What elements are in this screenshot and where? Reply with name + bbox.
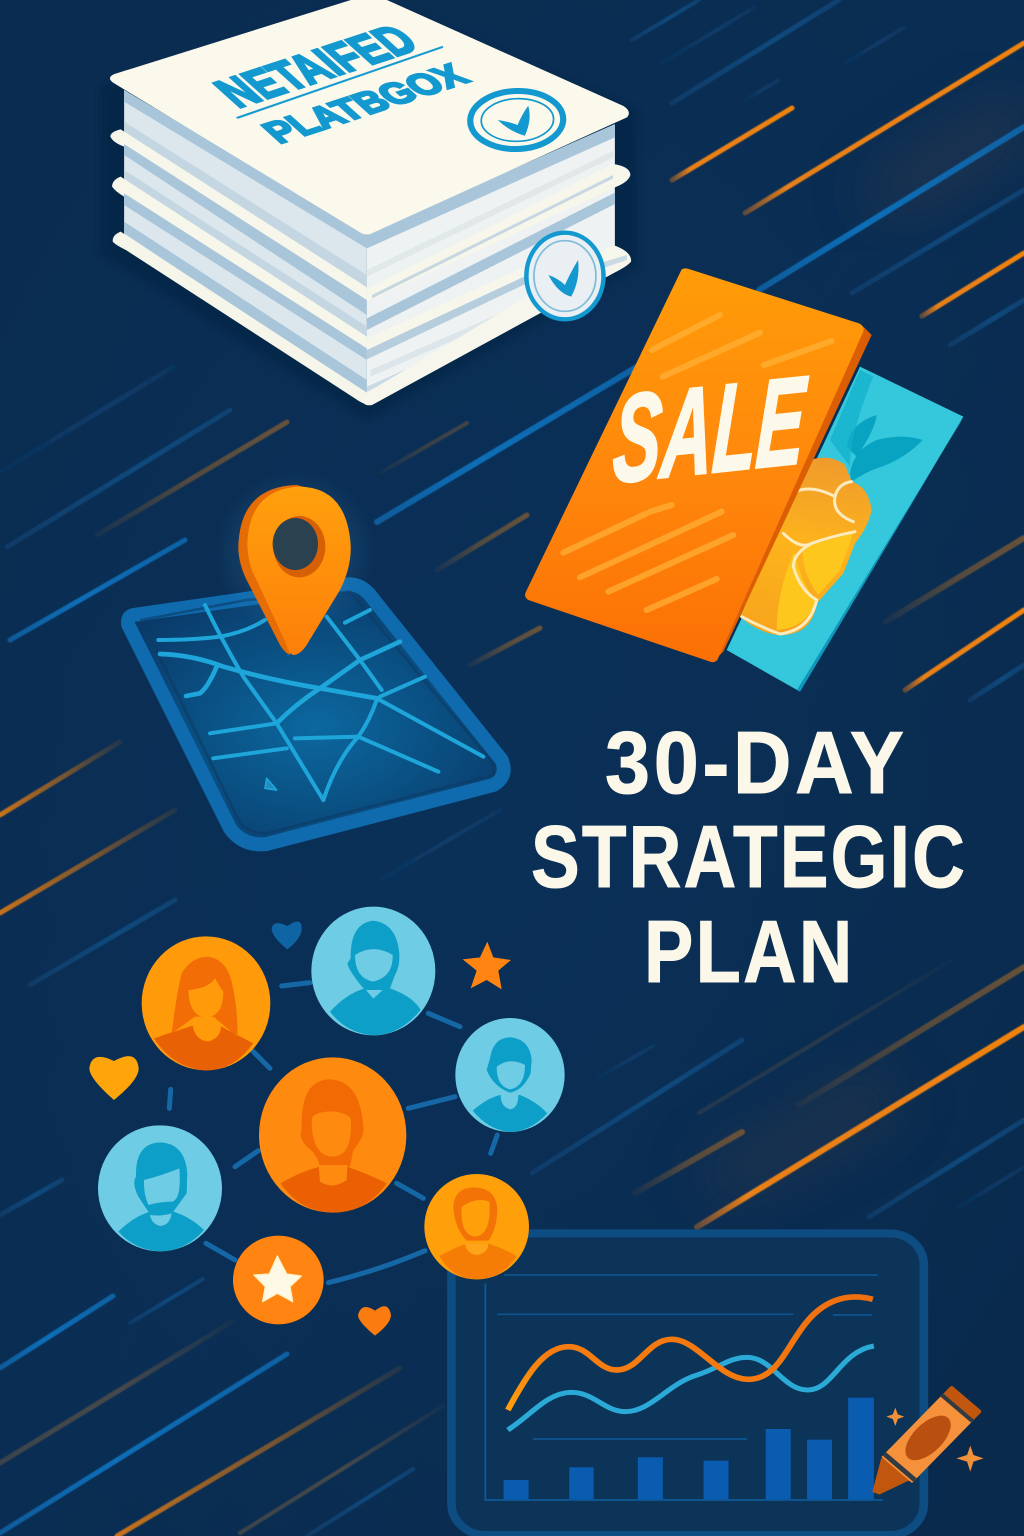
person: bearded man, teal left <box>98 1125 222 1251</box>
map with location pin <box>128 470 504 844</box>
book right side <box>363 124 631 405</box>
crayon <box>859 1385 982 1506</box>
map tablet <box>128 584 504 844</box>
pin glow <box>215 470 375 637</box>
chart frame <box>451 1233 924 1535</box>
honey jar <box>740 458 872 635</box>
flyers: sale card and product card <box>525 268 963 692</box>
orange sale card <box>525 268 872 662</box>
dashboard chart <box>451 1233 984 1535</box>
sparkles <box>886 1408 984 1472</box>
cover seal <box>469 89 564 151</box>
bars <box>504 1398 874 1499</box>
title: STRATEGIC <box>531 809 967 907</box>
cover title lines <box>203 17 478 150</box>
person: central, orange <box>259 1057 406 1213</box>
sale text: SALE <box>610 351 810 510</box>
yellow heart <box>89 1056 139 1100</box>
star badge <box>233 1236 324 1324</box>
book shadow <box>100 0 637 420</box>
person: man, teal top <box>311 907 435 1035</box>
title <box>531 713 967 1001</box>
orange heart <box>358 1306 391 1336</box>
stack of papers: playbook <box>100 0 637 420</box>
people network <box>89 907 565 1336</box>
blue heart <box>272 922 302 949</box>
leaves <box>847 415 923 482</box>
person: woman, orange <box>142 936 270 1070</box>
cover title lines: PLATBGOX <box>254 58 478 150</box>
blue trend line <box>508 1346 874 1430</box>
book cover <box>110 0 629 235</box>
book left side <box>110 90 372 404</box>
connectors <box>169 983 497 1283</box>
person: man, teal right <box>455 1018 565 1132</box>
orange star <box>463 942 511 989</box>
person: small, orange <box>424 1174 529 1279</box>
location pin <box>238 485 351 655</box>
chart axes and grid <box>485 1275 883 1500</box>
orange trend line <box>508 1297 873 1410</box>
side seal <box>526 233 604 319</box>
card highlights <box>563 315 832 610</box>
map roads <box>158 605 483 800</box>
title: 30-DAY <box>605 713 908 812</box>
teal product card <box>727 367 963 692</box>
title: PLAN <box>644 903 855 1001</box>
